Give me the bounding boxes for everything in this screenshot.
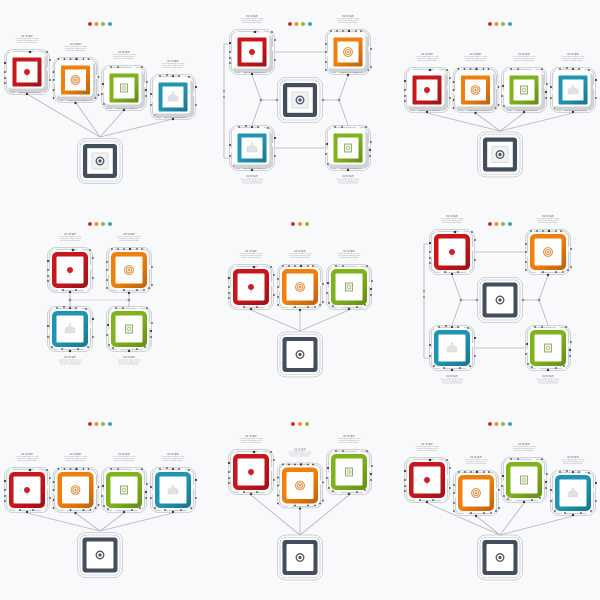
card: step 3: consectetur adipiscing elit [113, 55, 135, 58]
card: step 1: consectetur adipiscing elit [241, 19, 263, 22]
card: step 2: Lorem ipsum dolor sit amet [118, 235, 141, 238]
card: step 1: 01 STEP [446, 214, 458, 218]
card: step 2: sed do eiusmod tempor [466, 462, 486, 465]
card: step 3: Lorem ipsum dolor sit amet [338, 252, 361, 255]
card: step 2: sed do eiusmod tempor [466, 59, 486, 62]
card: step 3: 03 STEP [123, 355, 135, 359]
card: step 2: sed do eiusmod tempor [66, 49, 86, 52]
card: step 4: consectetur adipiscing elit [162, 457, 184, 460]
card: step 3 [326, 249, 373, 310]
card: step 3: consectetur adipiscing elit [338, 439, 360, 442]
legend dots [88, 222, 112, 226]
connector lines [427, 113, 573, 131]
card: central hub [478, 132, 522, 177]
card: step 1: 01 STEP [245, 434, 257, 438]
card: step 4 [150, 59, 197, 120]
card: step 1: Lorem ipsum dolor sit amet [441, 217, 464, 220]
card: step 1 [404, 52, 451, 113]
card: step 1: 01 STEP [64, 232, 76, 236]
connector lines [27, 513, 173, 531]
card: step 4: Lorem ipsum dolor sit amet [562, 458, 585, 461]
card: step 4 [429, 325, 476, 384]
card: step 1 [4, 452, 51, 513]
card: central hub [478, 535, 522, 580]
card: step 3: 03 STEP [118, 50, 130, 54]
card: central hub [78, 532, 122, 578]
card: central hub [478, 278, 522, 322]
card: step 3 [101, 452, 148, 513]
card: step 2: Lorem ipsum dolor sit amet [537, 217, 560, 220]
card: step 3: sed do eiusmod tempor [339, 256, 359, 259]
card: step 1 [429, 214, 476, 275]
connector lines [223, 44, 348, 158]
card: step 2: consectetur adipiscing elit [118, 237, 140, 240]
card: step 3: consectetur adipiscing elit [113, 457, 135, 460]
card: step 4 [47, 306, 94, 366]
card: step 3: sed do eiusmod tempor [514, 59, 534, 62]
card: step 4: 04 STEP [246, 174, 258, 178]
panel: hub in centre with four corners [223, 14, 372, 184]
card: step 4: 04 STEP [567, 455, 579, 459]
card: step 4: consectetur adipiscing elit [562, 57, 584, 60]
card: step 1: consectetur adipiscing elit [59, 237, 81, 240]
card: step 4: Lorem ipsum dolor sit amet [162, 62, 185, 65]
card: step 4: consectetur adipiscing elit [59, 360, 81, 364]
panel: four steps in a row above hub [404, 22, 597, 177]
card: step 2: 02 STEP [70, 452, 81, 456]
card: step 1: consectetur adipiscing elit [16, 39, 38, 42]
card: step 3: consectetur adipiscing elit [537, 380, 559, 382]
card: step 3: 03 STEP [342, 174, 354, 178]
card: step 2: consectetur adipiscing elit [537, 219, 559, 222]
connector lines [427, 503, 573, 535]
connector lines [69, 292, 130, 307]
panel: four steps descending to hub [4, 22, 197, 183]
card: step 3: consectetur adipiscing elit [118, 360, 140, 364]
card: step 2: consectetur adipiscing elit [289, 452, 311, 456]
card: step 4 [550, 455, 597, 516]
card: step 4: Lorem ipsum dolor sit amet [562, 55, 585, 58]
card: step 1: 01 STEP [421, 52, 433, 56]
card: step 1: 01 STEP [21, 34, 33, 38]
card: step 2: sed do eiusmod tempor [538, 221, 558, 224]
card: step 4: consectetur adipiscing elit [441, 380, 463, 382]
card: step 3 [326, 434, 373, 495]
card: step 3: Lorem ipsum dolor sit amet [513, 445, 536, 448]
card: step 1 [47, 232, 94, 293]
panel: four staggered steps above hub [404, 422, 597, 580]
card: step 1 [229, 14, 276, 75]
card: step 1: Lorem ipsum dolor sit amet [16, 37, 39, 40]
card: step 3: 03 STEP [542, 374, 554, 378]
card: step 1: 01 STEP [245, 249, 257, 253]
panel: two by two grid [47, 222, 153, 366]
legend dots [488, 222, 512, 226]
card: step 1 [404, 442, 451, 503]
connector lines [251, 310, 349, 331]
connector lines [423, 244, 548, 358]
card: step 3: Lorem ipsum dolor sit amet [113, 455, 136, 458]
card: step 3: Lorem ipsum dolor sit amet [118, 358, 141, 362]
card: step 2: Lorem ipsum dolor sit amet [64, 455, 87, 458]
card: step 3: 03 STEP [518, 442, 530, 446]
card: step 4: 04 STEP [446, 374, 458, 378]
card: step 2: sed do eiusmod tempor [66, 459, 86, 462]
panel: three staggered steps above hub [228, 422, 373, 580]
card: step 4 [229, 125, 276, 184]
card: step 4: sed do eiusmod tempor [163, 66, 183, 69]
card: step 2: consectetur adipiscing elit [337, 19, 359, 22]
panel: four flat steps in a row above hub [4, 422, 197, 578]
card: step 4: 04 STEP [64, 355, 76, 359]
card: step 1 [228, 249, 275, 310]
card: step 1: sed do eiusmod tempor [241, 441, 261, 444]
card: step 2 [53, 42, 99, 104]
card: step 2: consectetur adipiscing elit [465, 57, 487, 60]
card: step 2: sed do eiusmod tempor [338, 21, 358, 24]
card: step 2: consectetur adipiscing elit [465, 460, 487, 463]
card: step 1: Lorem ipsum dolor sit amet [241, 17, 264, 20]
card: step 4: sed do eiusmod tempor [442, 382, 462, 384]
card: step 3 [501, 52, 548, 113]
card: step 1: Lorem ipsum dolor sit amet [240, 437, 263, 440]
card: step 3: sed do eiusmod tempor [538, 382, 558, 384]
card: step 4: Lorem ipsum dolor sit amet [241, 178, 264, 180]
card: step 3: consectetur adipiscing elit [338, 254, 360, 257]
card: step 2: 02 STEP [123, 232, 135, 236]
card: step 1 [228, 434, 275, 495]
card: step 2 [106, 232, 153, 294]
card: step 2 [525, 214, 572, 276]
card: step 3: consectetur adipiscing elit [337, 180, 359, 182]
card: step 3 [325, 126, 372, 184]
card: step 3: 03 STEP [343, 434, 355, 438]
card: step 3: sed do eiusmod tempor [339, 441, 359, 444]
card: step 4: Lorem ipsum dolor sit amet [162, 455, 185, 458]
card: step 1: consectetur adipiscing elit [240, 254, 262, 257]
card: step 3: 03 STEP [343, 249, 355, 253]
card: step 1 [4, 34, 51, 95]
card: step 3 [501, 442, 548, 503]
card: step 2 [453, 455, 500, 517]
card: step 2: 02 STEP [294, 249, 306, 253]
card: step 1: consectetur adipiscing elit [240, 439, 262, 442]
card: step 3: Lorem ipsum dolor sit amet [337, 178, 360, 180]
card: step 2 [277, 448, 324, 510]
card: step 2: Lorem ipsum dolor sit amet [289, 252, 312, 255]
legend dots [291, 422, 309, 426]
card: step 2 [325, 14, 372, 76]
card: step 4: sed do eiusmod tempor [163, 459, 183, 462]
card: central hub [278, 535, 322, 580]
card: step 2: 02 STEP [470, 455, 482, 459]
card: step 2: Lorem ipsum dolor sit amet [289, 450, 312, 454]
card: step 1: sed do eiusmod tempor [17, 459, 37, 462]
legend dots [488, 22, 512, 26]
card: step 3 [525, 326, 572, 384]
card: step 3: sed do eiusmod tempor [114, 57, 134, 60]
card: step 3: sed do eiusmod tempor [338, 182, 358, 184]
card: step 2: 02 STEP [542, 214, 554, 218]
card: step 4: consectetur adipiscing elit [562, 460, 584, 463]
card: step 2: 02 STEP [70, 42, 81, 46]
card: step 2: sed do eiusmod tempor [290, 256, 310, 259]
card: step 4: 04 STEP [167, 452, 179, 456]
legend dots [488, 422, 512, 426]
card: step 1: sed do eiusmod tempor [417, 59, 437, 62]
card: step 1: Lorem ipsum dolor sit amet [16, 455, 39, 458]
card: central hub [78, 138, 122, 184]
card: step 2: Lorem ipsum dolor sit amet [464, 55, 487, 58]
connector lines [27, 94, 173, 137]
card: step 4: sed do eiusmod tempor [563, 462, 583, 465]
card: step 3: Lorem ipsum dolor sit amet [537, 378, 560, 380]
card: step 3 [106, 306, 153, 366]
card: step 4: sed do eiusmod tempor [60, 362, 80, 366]
card: step 1: Lorem ipsum dolor sit amet [59, 235, 82, 238]
card: step 1: Lorem ipsum dolor sit amet [416, 55, 439, 58]
card: step 1: 01 STEP [21, 452, 33, 456]
card: central hub [278, 332, 322, 377]
card: step 1: Lorem ipsum dolor sit amet [240, 252, 263, 255]
card: step 3: 03 STEP [118, 452, 130, 456]
card: step 2: 02 STEP [342, 14, 354, 18]
card: central hub [278, 78, 322, 122]
card: step 1: consectetur adipiscing elit [416, 57, 438, 60]
card: step 1: consectetur adipiscing elit [441, 219, 463, 222]
card: step 1: 01 STEP [421, 442, 433, 446]
card: step 3 [101, 50, 148, 111]
card: step 1: 01 STEP [246, 14, 258, 18]
card: step 2: sed do eiusmod tempor [119, 239, 139, 242]
card: step 4: consectetur adipiscing elit [241, 180, 263, 182]
card: step 2: Lorem ipsum dolor sit amet [465, 458, 488, 461]
card: step 4: sed do eiusmod tempor [563, 59, 583, 62]
card: step 1: Lorem ipsum dolor sit amet [416, 445, 439, 448]
card: step 1: sed do eiusmod tempor [442, 221, 462, 224]
card: step 2: Lorem ipsum dolor sit amet [64, 45, 87, 48]
card: step 2: consectetur adipiscing elit [65, 457, 87, 460]
card: step 3: sed do eiusmod tempor [114, 459, 134, 462]
card: step 3: Lorem ipsum dolor sit amet [338, 437, 361, 440]
connector lines [251, 495, 349, 535]
card: step 2: sed do eiusmod tempor [290, 454, 310, 458]
card: step 4: sed do eiusmod tempor [242, 182, 262, 184]
card: step 1: consectetur adipiscing elit [16, 457, 38, 460]
card: step 1: sed do eiusmod tempor [242, 21, 262, 24]
card: step 2 [277, 249, 324, 311]
card: step 2 [453, 52, 499, 114]
card: step 3: Lorem ipsum dolor sit amet [513, 55, 536, 58]
card: step 4: Lorem ipsum dolor sit amet [59, 358, 82, 362]
card: step 2: consectetur adipiscing elit [289, 254, 311, 257]
legend dots [291, 222, 309, 226]
card: step 4: consectetur adipiscing elit [162, 64, 184, 67]
card: step 2: 02 STEP [470, 52, 481, 56]
card: step 2 [53, 452, 99, 514]
card: step 1: sed do eiusmod tempor [241, 256, 261, 259]
card: step 3: sed do eiusmod tempor [514, 449, 534, 452]
card: step 1: sed do eiusmod tempor [417, 449, 437, 452]
card: step 3: consectetur adipiscing elit [513, 57, 535, 60]
card: step 1: sed do eiusmod tempor [17, 41, 37, 44]
card: step 4: Lorem ipsum dolor sit amet [441, 378, 464, 380]
card: step 1: consectetur adipiscing elit [416, 447, 438, 450]
card: step 4 [150, 452, 197, 513]
card: step 2: consectetur adipiscing elit [65, 47, 87, 50]
legend dots [288, 22, 312, 26]
card: step 3: sed do eiusmod tempor [119, 362, 139, 366]
panel: three steps in a row above hub [228, 222, 373, 377]
legend dots [88, 22, 112, 26]
panel: hub in centre with four flat corners [423, 214, 572, 384]
card: step 1: sed do eiusmod tempor [60, 239, 80, 242]
card: step 3: Lorem ipsum dolor sit amet [113, 53, 136, 56]
card: step 2: Lorem ipsum dolor sit amet [337, 17, 360, 20]
card: step 2: 02 STEP [294, 448, 306, 452]
card: step 4: 04 STEP [567, 52, 579, 56]
card: step 4: 04 STEP [167, 59, 179, 63]
card: step 3: 03 STEP [518, 52, 530, 56]
card: step 3: consectetur adipiscing elit [513, 447, 535, 450]
legend dots [88, 422, 112, 426]
card: step 4 [550, 52, 597, 113]
